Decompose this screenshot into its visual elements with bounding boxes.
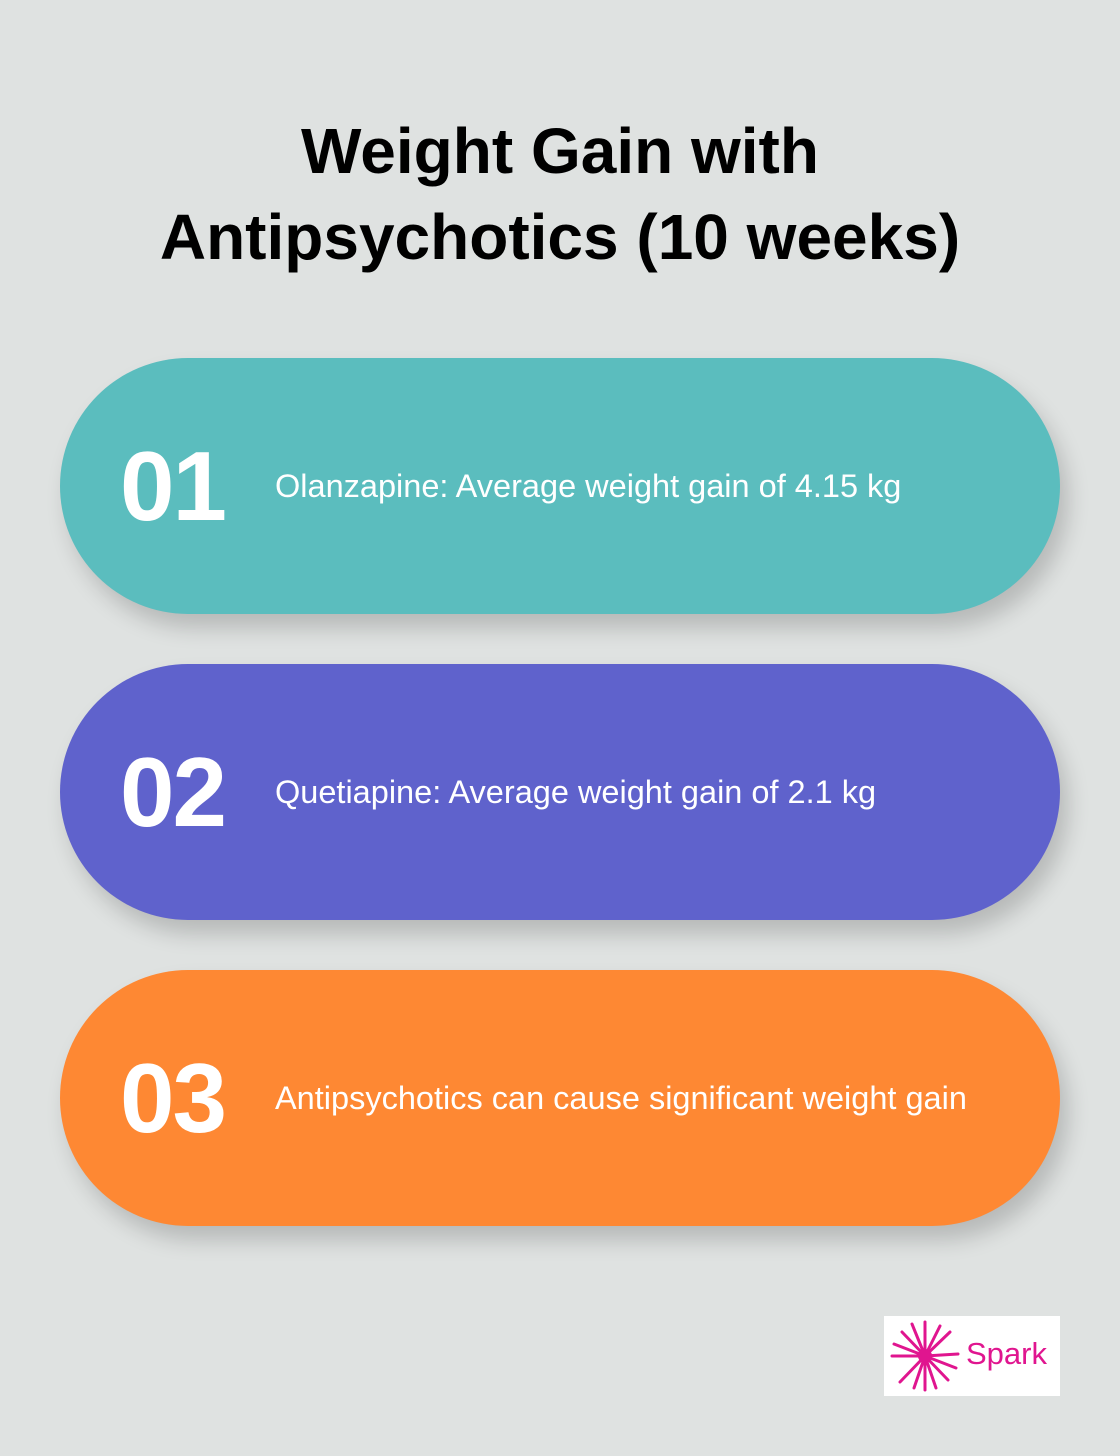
title — [160, 115, 960, 273]
title: Weight Gain with — [301, 115, 819, 187]
logo: Spark — [884, 1316, 1060, 1396]
icon: spark burst — [890, 1320, 960, 1392]
text 01: Olanzapine: Average weight gain of 4.15 kg — [275, 468, 901, 504]
logo text: Spark — [966, 1336, 1047, 1371]
number 03: 03 — [120, 1043, 225, 1153]
text 02: Quetiapine: Average weight gain of 2.1 kg — [275, 774, 876, 810]
text 03: Antipsychotics can cause significant weight gain — [275, 1080, 967, 1116]
title: Antipsychotics (10 weeks) — [160, 201, 960, 273]
number 02: 02 — [120, 737, 225, 847]
panel: 01 olanzapine — [60, 358, 1060, 614]
number 01: 01 — [120, 431, 225, 541]
panel: 03 general — [60, 970, 1060, 1226]
panel: 02 quetiapine — [60, 664, 1060, 920]
